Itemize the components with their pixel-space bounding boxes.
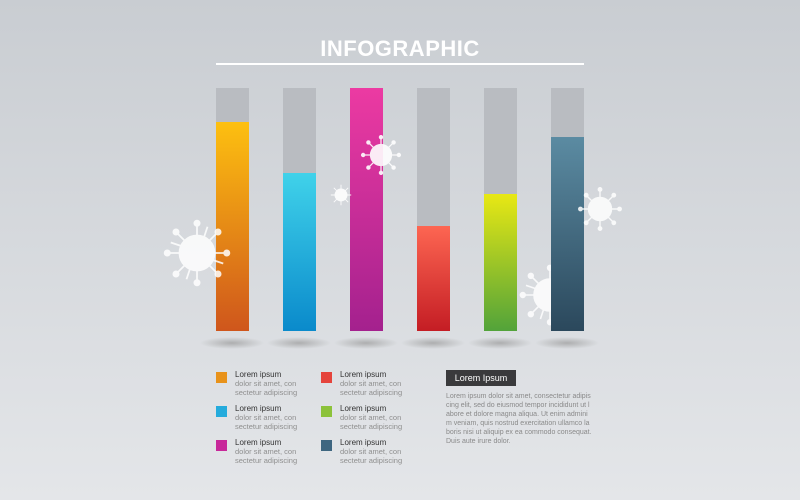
- heading label: [446, 370, 516, 386]
- legend: Lorem ipsum: [235, 438, 281, 447]
- title: INFOGRAPHIC: [320, 36, 480, 61]
- shadows: [200, 337, 599, 349]
- legend: sectetur adipiscing: [235, 422, 297, 431]
- legend: dolor sit amet, con: [340, 379, 401, 388]
- virus behind slate bar: [520, 265, 580, 325]
- heading label: Lorem Ipsum: [455, 373, 507, 383]
- text block: [446, 370, 592, 445]
- icon: virus small: [331, 185, 351, 205]
- legend: sectetur adipiscing: [340, 456, 402, 465]
- legend: dolor sit amet, con: [340, 447, 401, 456]
- icon: virus right: [579, 188, 621, 230]
- legend: Lorem ipsum: [235, 404, 281, 413]
- legend: Lorem ipsum: [340, 404, 386, 413]
- icon: virus on magenta: [362, 136, 400, 174]
- legend: dolor sit amet, con: [235, 379, 296, 388]
- bar fills: [216, 122, 249, 331]
- legend: Lorem ipsum: [340, 438, 386, 447]
- legend: sectetur adipiscing: [235, 388, 297, 397]
- legend: Lorem ipsum: [340, 370, 386, 379]
- legend: sectetur adipiscing: [235, 456, 297, 465]
- legend: dolor sit amet, con: [235, 413, 296, 422]
- title underline: [216, 63, 584, 65]
- legend: [216, 370, 402, 465]
- icon: virus large: [165, 221, 229, 285]
- legend: sectetur adipiscing: [340, 388, 402, 397]
- legend: dolor sit amet, con: [235, 447, 296, 456]
- text block: Lorem ipsum dolor sit amet, consectetur adipis cing elit, sed do eiusmod tempor incididunt ut l abore et dolore magna aliqua. Ut enim admini m veniam, quis nostrud exercitation ullamco la boris nisi ut aliquip ex ea commodo consequat. Duis aute irure dolor.: [446, 393, 592, 445]
- legend: dolor sit amet, con: [340, 413, 401, 422]
- legend: Lorem ipsum: [235, 370, 281, 379]
- legend: sectetur adipiscing: [340, 422, 402, 431]
- bar tracks: [216, 88, 584, 331]
